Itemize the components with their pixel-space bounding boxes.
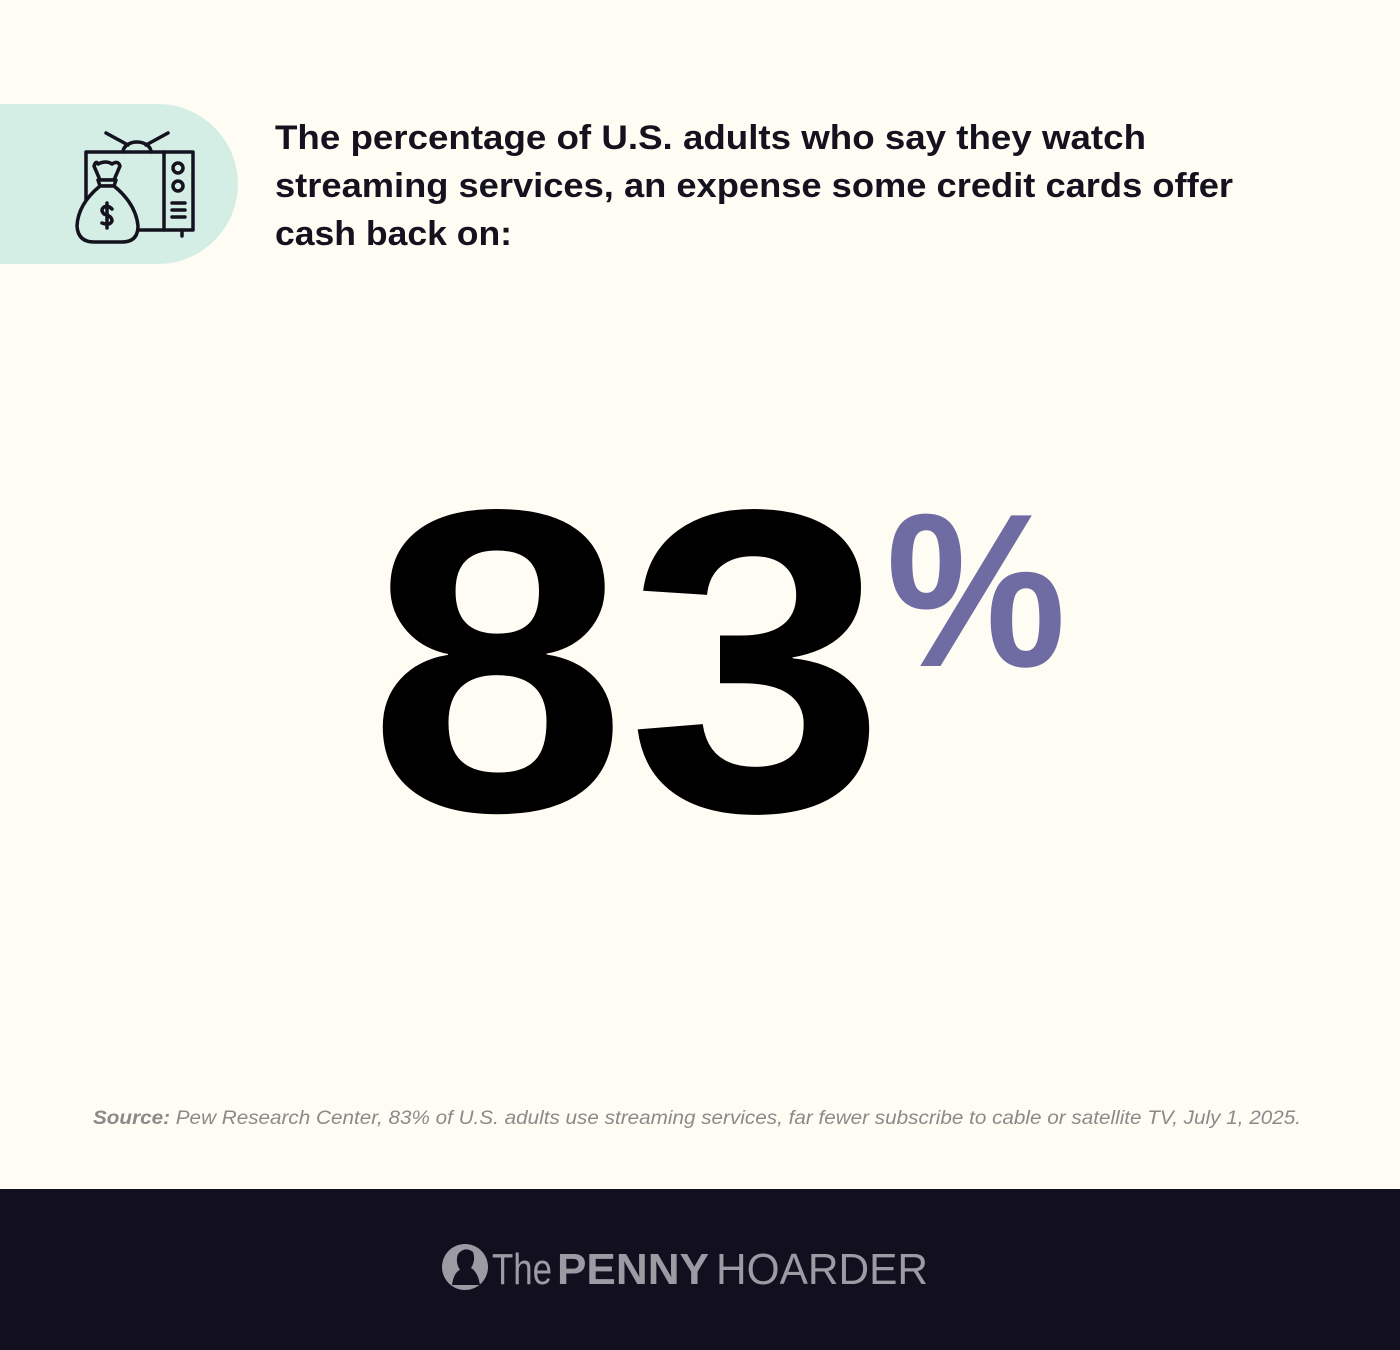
title: The percentage of U.S. adults who say they watch — [275, 119, 1146, 157]
icon: tv with money bag — [77, 133, 193, 242]
title — [275, 119, 1233, 253]
logo: The — [492, 1245, 552, 1294]
title: streaming services, an expense some credit cards offer — [275, 167, 1233, 205]
icon badge — [0, 104, 238, 264]
big statistic 83%: 83 — [368, 421, 886, 902]
source note: Source: Pew Research Center, 83% of U.S. adults use streaming services, far fewer subscribe to cable or satellite TV, July 1, 2025. — [93, 1108, 1301, 1129]
logo: HOARDER — [716, 1245, 928, 1294]
big statistic 83% — [368, 421, 1066, 902]
title: cash back on: — [275, 215, 512, 253]
logo — [442, 1244, 928, 1294]
logo: PENNY — [557, 1245, 709, 1294]
footer — [0, 1189, 1400, 1350]
big statistic 83%: % — [886, 469, 1066, 713]
